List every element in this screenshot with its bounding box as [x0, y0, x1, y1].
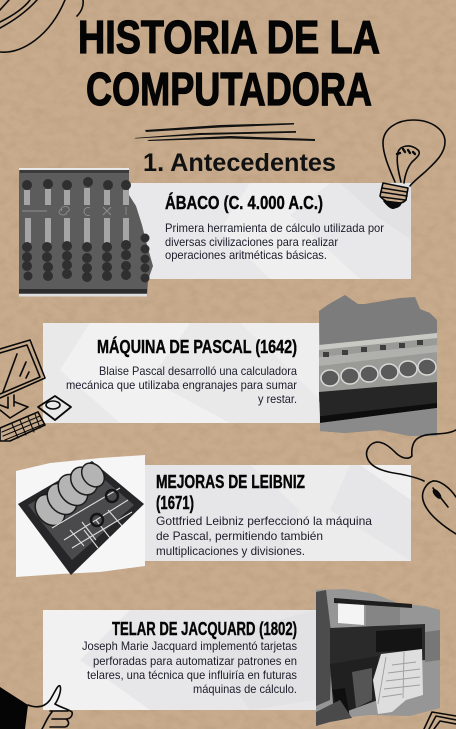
panel: leibniz text card: [145, 465, 411, 561]
body: abaco: [165, 221, 384, 262]
title: [78, 11, 380, 115]
body: jacquard: perforadas para automatizar patrones en: [93, 654, 297, 668]
pascal windows: [323, 340, 423, 357]
body: leibniz: multiplicaciones y divisiones.: [156, 544, 305, 558]
icon: computer mouse with cable: [367, 430, 456, 534]
heading: leibniz: MEJORAS DE LEIBNIZ: [156, 472, 305, 492]
image: abacus: [19, 168, 153, 296]
body: pascal: [66, 364, 297, 406]
title underline scribble: [134, 123, 315, 141]
title: COMPUTADORA: [86, 63, 372, 115]
icon: desktop computer: [0, 340, 71, 441]
heading: jacquard: TELAR DE JACQUARD (1802): [112, 619, 297, 639]
body: pascal: y restar.: [258, 392, 297, 406]
body: pascal: mecánica que utilizaba engranajes para sumar: [66, 378, 297, 392]
heading: abaco: ÁBACO (C. 4.000 A.C.): [165, 192, 323, 213]
icon: light bulb: [380, 120, 445, 208]
abacus beads: [22, 177, 150, 282]
body: jacquard: Joseph Marie Jacquard implementó tarjetas: [82, 639, 297, 653]
decorative doodle: top-left scribble: [0, 0, 83, 52]
heading: leibniz: (1671): [156, 493, 194, 513]
body: abaco: Primera herramienta de cálculo utilizada por: [165, 221, 384, 235]
panel: abaco text card: [128, 183, 411, 279]
body: jacquard: telares, una técnica que influiría en futuras: [87, 668, 297, 682]
leibniz gears: [52, 488, 132, 548]
heading: pascal: MÁQUINA DE PASCAL (1642): [97, 336, 297, 357]
body: abaco: diversas civilizaciones para realizar: [165, 235, 338, 249]
image: leibniz machine: [16, 455, 145, 577]
title: HISTORIA DE LA: [78, 11, 380, 63]
abacus slots: [24, 188, 129, 243]
section heading: 1. Antecedentes: [143, 149, 336, 177]
icon: hand thumbs-up: [0, 686, 72, 729]
abacus numerals: [22, 206, 126, 216]
leibniz drums: [29, 459, 109, 531]
body: pascal: Blaise Pascal desarrolló una calculadora: [99, 364, 297, 378]
body: abaco: operaciones aritméticas básicas.: [165, 248, 327, 262]
body: leibniz: Gottfried Leibniz perfeccionó la máquina: [156, 514, 372, 528]
image: pascal machine: [319, 295, 437, 436]
body: leibniz: [156, 514, 372, 558]
body: jacquard: [82, 639, 297, 696]
panel: pascal text card: [43, 323, 320, 423]
panel: jacquard text card: [43, 610, 316, 710]
body: leibniz: de Pascal, permitiendo también: [156, 529, 323, 543]
pascal wheels: [321, 359, 436, 386]
body: jacquard: máquinas de cálculo.: [193, 682, 297, 696]
jacquard punched cards: [378, 652, 420, 704]
image: jacquard loom: [316, 589, 440, 726]
heading: leibniz: [156, 472, 305, 513]
icon: corner book doodle: [424, 712, 456, 729]
